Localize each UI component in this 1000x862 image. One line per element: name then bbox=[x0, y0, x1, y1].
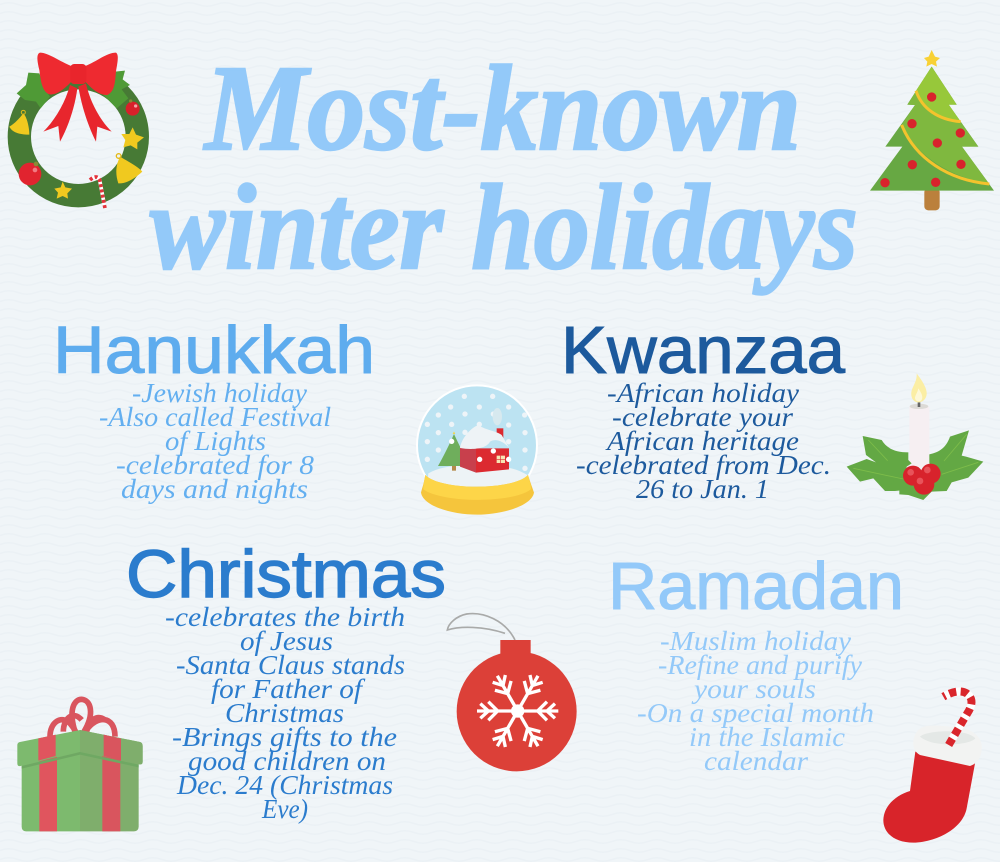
panel: Ramadan bbox=[608, 549, 904, 776]
heading: Ramadan: Ramadan bbox=[608, 549, 904, 624]
text block: Ramadan facts: in the Islamic bbox=[689, 721, 845, 752]
text block: Christmas facts: for Father of bbox=[211, 673, 366, 704]
text block: Ramadan facts: your souls bbox=[691, 673, 816, 704]
heading: Christmas: Christmas bbox=[126, 537, 446, 612]
title bbox=[150, 41, 858, 295]
icon: christmas tree bbox=[870, 50, 994, 210]
text block: Christmas facts: Christmas bbox=[225, 697, 344, 728]
text block: Kwanzaa facts: African heritage bbox=[605, 425, 799, 456]
icon: gift box bbox=[17, 699, 143, 831]
icon: snow globe bbox=[417, 385, 537, 515]
text block: Christmas facts bbox=[165, 601, 405, 824]
text block: Christmas facts: -Santa Claus stands bbox=[176, 649, 405, 680]
text block: Kwanzaa facts: 26 to Jan. 1 bbox=[636, 473, 769, 504]
text block: Hanukkah facts bbox=[99, 377, 331, 504]
text block: Christmas facts: Eve) bbox=[261, 793, 308, 824]
text block: Kwanzaa facts bbox=[576, 377, 831, 504]
text block: Christmas facts: of Jesus bbox=[240, 625, 333, 656]
text block: Hanukkah facts: -Jewish holiday bbox=[132, 377, 308, 408]
text block: Kwanzaa facts: -celebrate your bbox=[612, 401, 793, 432]
panel: Kwanzaa bbox=[561, 313, 846, 504]
text block: Ramadan facts: -Muslim holiday bbox=[660, 625, 852, 656]
icon: wreath bbox=[9, 53, 144, 208]
icon: candle with holly bbox=[847, 373, 983, 500]
text block: Ramadan facts bbox=[637, 625, 874, 776]
text block: Christmas facts: Dec. 24 (Christmas bbox=[176, 769, 393, 800]
text block: Hanukkah facts: -celebrated for 8 bbox=[116, 449, 314, 480]
text block: Christmas facts: good children on bbox=[188, 745, 386, 776]
text block: Ramadan facts: calendar bbox=[704, 745, 808, 776]
title: winter holidays bbox=[150, 160, 858, 295]
text block: Hanukkah facts: -Also called Festival bbox=[99, 401, 331, 432]
icon: ornament bbox=[447, 614, 577, 771]
panel: Christmas bbox=[126, 537, 446, 824]
text block: Christmas facts: -celebrates the birth bbox=[165, 601, 405, 632]
text block: Kwanzaa facts: -celebrated from Dec. bbox=[576, 449, 831, 480]
text block: Hanukkah facts: of Lights bbox=[165, 425, 266, 456]
icon: stocking with candy cane bbox=[883, 691, 982, 843]
text block: Hanukkah facts: days and nights bbox=[121, 473, 308, 504]
heading: Kwanzaa: Kwanzaa bbox=[561, 313, 846, 388]
heading: Hanukkah: Hanukkah bbox=[53, 313, 375, 388]
text block: Ramadan facts: -On a special month bbox=[637, 697, 874, 728]
text block: Kwanzaa facts: -African holiday bbox=[607, 377, 800, 408]
text block: Christmas facts: -Brings gifts to the bbox=[172, 721, 397, 752]
title: Most-known bbox=[203, 41, 801, 176]
text block: Ramadan facts: -Refine and purify bbox=[658, 649, 863, 680]
panel: Hanukkah bbox=[53, 313, 375, 504]
